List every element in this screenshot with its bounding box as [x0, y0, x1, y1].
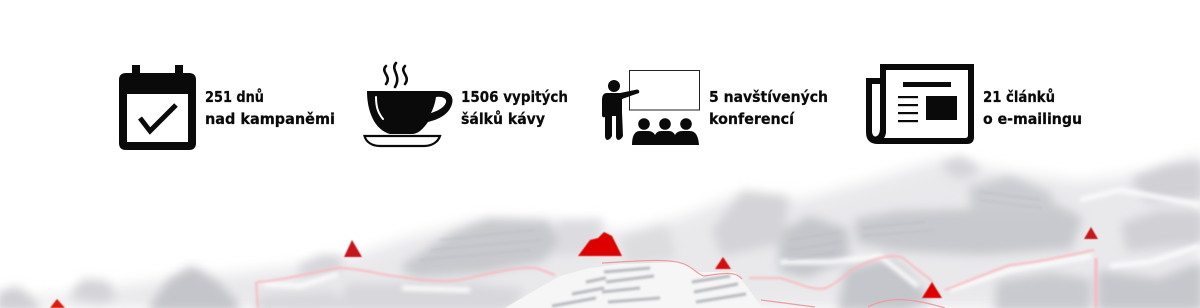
soft contour stripes: [420, 192, 1042, 260]
stat: days on campaigns: [119, 65, 335, 150]
white ridges between the grey slopes: [264, 190, 1200, 290]
stat: conferences visited: [602, 70, 828, 145]
text: 1506 cups of coffee drunk: šálků kávy: [461, 110, 545, 128]
icon: coffee cup on saucer: [364, 63, 453, 146]
icon: calendar with check mark: [119, 65, 196, 150]
text: 1506 cups of coffee drunk: 1506 vypitých: [461, 88, 568, 106]
text: 1506 cups of coffee drunk: [461, 88, 568, 128]
central foreground mountain: [505, 260, 945, 308]
text: 21 newsletter articles: o e-mailingu: [983, 110, 1082, 128]
blurred mountain landscape: [0, 152, 1200, 308]
stat: cups of coffee: [364, 63, 568, 146]
text: 21 newsletter articles: 21 článků: [983, 88, 1055, 106]
text: 5 conferences visited: 5 navštívených: [709, 88, 828, 106]
text: 21 newsletter articles: [983, 88, 1082, 128]
text: 251 days over campaigns: [205, 88, 335, 128]
pale red trail lines: [256, 250, 1096, 308]
text: 251 days over campaigns: 251 dnů: [205, 88, 264, 106]
text: 5 conferences visited: konferencí: [709, 110, 795, 128]
icon: presenter with board and audience: [602, 70, 700, 145]
icon: newspaper: [866, 64, 974, 144]
red peak markers: [50, 227, 1098, 308]
stat: newsletter articles: [866, 64, 1082, 144]
text: 5 conferences visited: [709, 88, 828, 128]
text: 251 days over campaigns: nad kampaněmi: [205, 110, 335, 128]
